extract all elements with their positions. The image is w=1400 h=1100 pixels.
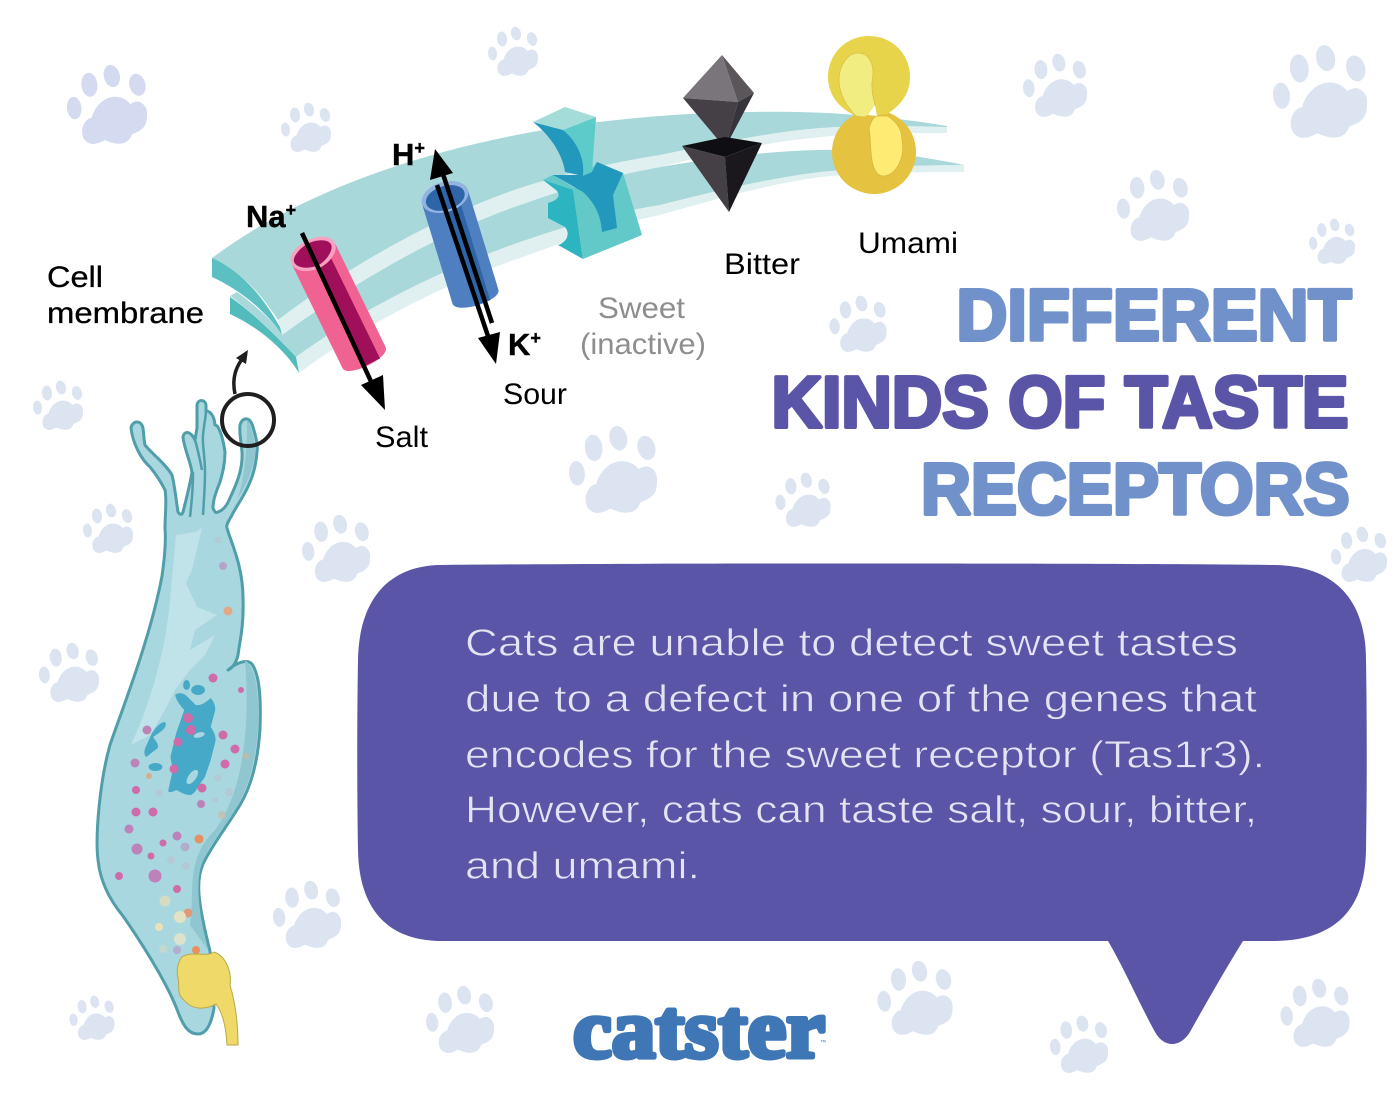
icon: umami receptor (828, 36, 916, 194)
body text (465, 622, 1265, 888)
finger dividers (190, 411, 206, 517)
icon: sour channel (blue cylinder) (418, 176, 501, 312)
body text: Cats are unable to detect sweet tastes (465, 622, 1238, 664)
label: bitter: Bitter (724, 248, 800, 281)
body text: encodes for the sweet receptor (Tas1r3). (465, 734, 1265, 776)
pale and orange granules (146, 536, 250, 954)
cell membrane band (212, 112, 964, 373)
title (772, 276, 1352, 530)
pink granules (115, 674, 244, 893)
label: salt: Salt (375, 421, 429, 454)
title: DIFFERENT (956, 276, 1352, 356)
arrow: potassium out of sour channel (437, 185, 500, 364)
title: KINDS OF TASTE (772, 363, 1348, 443)
nerve fibre (177, 952, 238, 1045)
finger shading (238, 420, 255, 498)
label: sweet inactive: Sweet (598, 292, 686, 325)
icon: bitter receptor (682, 55, 762, 212)
label: Na+: + (286, 200, 296, 220)
body text: due to a defect in one of the genes that (465, 678, 1258, 720)
taste cell illustration (97, 400, 260, 1045)
cell shading (131, 528, 217, 745)
label: H+: H (392, 137, 414, 172)
cell body (97, 400, 260, 1034)
body text: However, cats can taste salt, sour, bitter, (465, 790, 1257, 832)
title: RECEPTORS (921, 450, 1350, 530)
label: cell membrane: Cell (47, 261, 103, 294)
body text: and umami. (465, 846, 700, 888)
label: Na+: Na (246, 199, 286, 234)
label: sour: Sour (503, 378, 567, 411)
icon: sweet receptor (inactive) (533, 107, 642, 259)
speech bubble with text (357, 564, 1367, 1044)
label: K+: + (530, 328, 541, 348)
icon: salt channel (pink cylinder) (285, 230, 389, 376)
logo: catster: catster (573, 983, 825, 1076)
arrow: sodium into salt channel (302, 233, 385, 410)
muted granules (124, 562, 227, 954)
arrow: hydrogen into sour channel (430, 149, 492, 323)
magnifier circle and arrow (222, 350, 274, 446)
label: H+: + (414, 138, 425, 158)
label: K+: K (508, 327, 530, 362)
label: sweet inactive: (inactive) (580, 328, 706, 361)
nucleus (144, 680, 216, 795)
logo: catster: ™ (820, 1039, 826, 1046)
label: cell membrane: membrane (47, 297, 204, 330)
label: umami: Umami (858, 227, 958, 260)
